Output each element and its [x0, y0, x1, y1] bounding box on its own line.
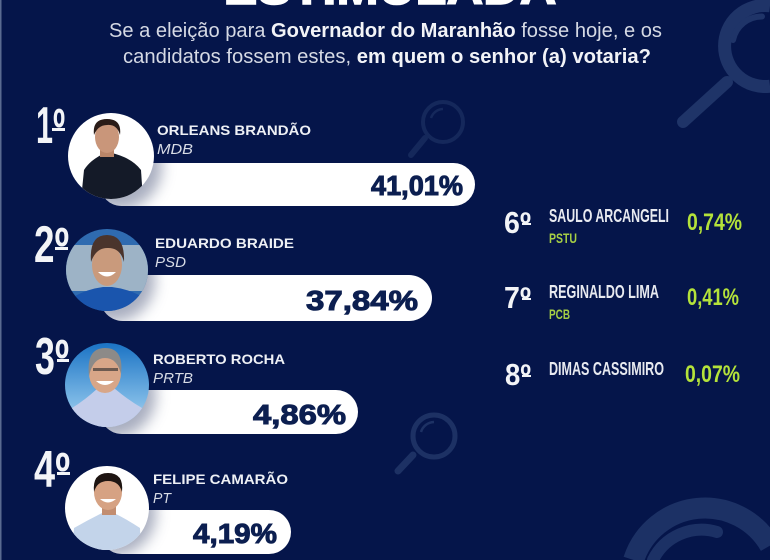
rank 4: º: [55, 440, 70, 503]
subtitle question: [109, 20, 662, 68]
party 2: PSD: [155, 254, 186, 271]
icon: magnifier top right: [683, 6, 770, 122]
portrait 4: [65, 466, 149, 552]
rank 7: 7: [504, 280, 521, 315]
candidate 2: Eduardo Braide: [35, 226, 432, 321]
rank 8: 8: [505, 357, 522, 392]
name 7: REGINALDO LIMA: [549, 282, 659, 302]
candidate 4: Felipe Camarão: [34, 451, 291, 554]
party 7: PCB: [549, 306, 570, 322]
subtitle question: Se a eleição para Governador do Maranhão fosse hoje, e os: [109, 20, 662, 42]
rank 8: º: [520, 357, 531, 394]
rank 4: 4: [34, 441, 63, 499]
icon: magnifier lower: [398, 415, 455, 471]
party 6: PSTU: [549, 230, 577, 246]
result bar 3: 4,86%: [253, 399, 346, 430]
party 4: PT: [153, 490, 173, 507]
icon: magnifier middle: [411, 102, 463, 155]
result bar 1: 41,01%: [371, 170, 463, 201]
rank 2: 2: [34, 216, 63, 274]
name 4: FELIPE CAMARÃO: [153, 470, 288, 487]
rank 7: [504, 280, 531, 317]
rank 7: º: [520, 280, 531, 317]
name 3: ROBERTO ROCHA: [153, 351, 285, 367]
rank 6: º: [520, 205, 531, 242]
percent 7: 0,41%: [687, 284, 739, 311]
icon: magnifier bottom right: [634, 508, 770, 560]
rank 1: º: [53, 96, 65, 159]
result bar 3: [106, 390, 358, 434]
subtitle question: candidatos fossem estes, em quem o senhor (a) votaria?: [123, 46, 651, 68]
rank 3: º: [55, 327, 69, 390]
candidate 6: Saulo Arcangeli: [504, 205, 742, 246]
rank 8: [505, 357, 531, 394]
name 8: DIMAS CASSIMIRO: [549, 359, 664, 379]
percent 8: 0,07%: [685, 361, 740, 388]
rank 1: 1: [36, 97, 65, 155]
portrait 3: [65, 343, 149, 428]
result bar 2: [104, 275, 432, 321]
rank 6: 6: [504, 205, 521, 240]
candidate 3: Roberto Rocha: [36, 338, 358, 434]
rank 3: 3: [35, 328, 64, 386]
party 1: MDB: [157, 141, 193, 158]
rank 2: º: [55, 215, 69, 278]
result bar 4: 4,19%: [193, 518, 277, 549]
name 6: SAULO ARCANGELI: [549, 206, 669, 226]
name 2: EDUARDO BRAIDE: [155, 235, 294, 251]
candidate 1: Orleans Brandão: [38, 107, 475, 206]
result bar 4: [110, 510, 291, 554]
result bar 1: [105, 163, 475, 206]
rank 6: [504, 205, 531, 242]
percent 6: 0,74%: [687, 209, 742, 236]
candidate 7: Reginaldo Lima: [504, 280, 739, 322]
portrait 2: [66, 229, 148, 312]
candidate 8: Dimas Cassimiro: [505, 357, 740, 394]
portrait 1: [68, 113, 154, 200]
result bar 2: 37,84%: [306, 285, 418, 316]
name 1: ORLEANS BRANDÃO: [157, 121, 311, 138]
party 3: PRTB: [153, 370, 193, 387]
